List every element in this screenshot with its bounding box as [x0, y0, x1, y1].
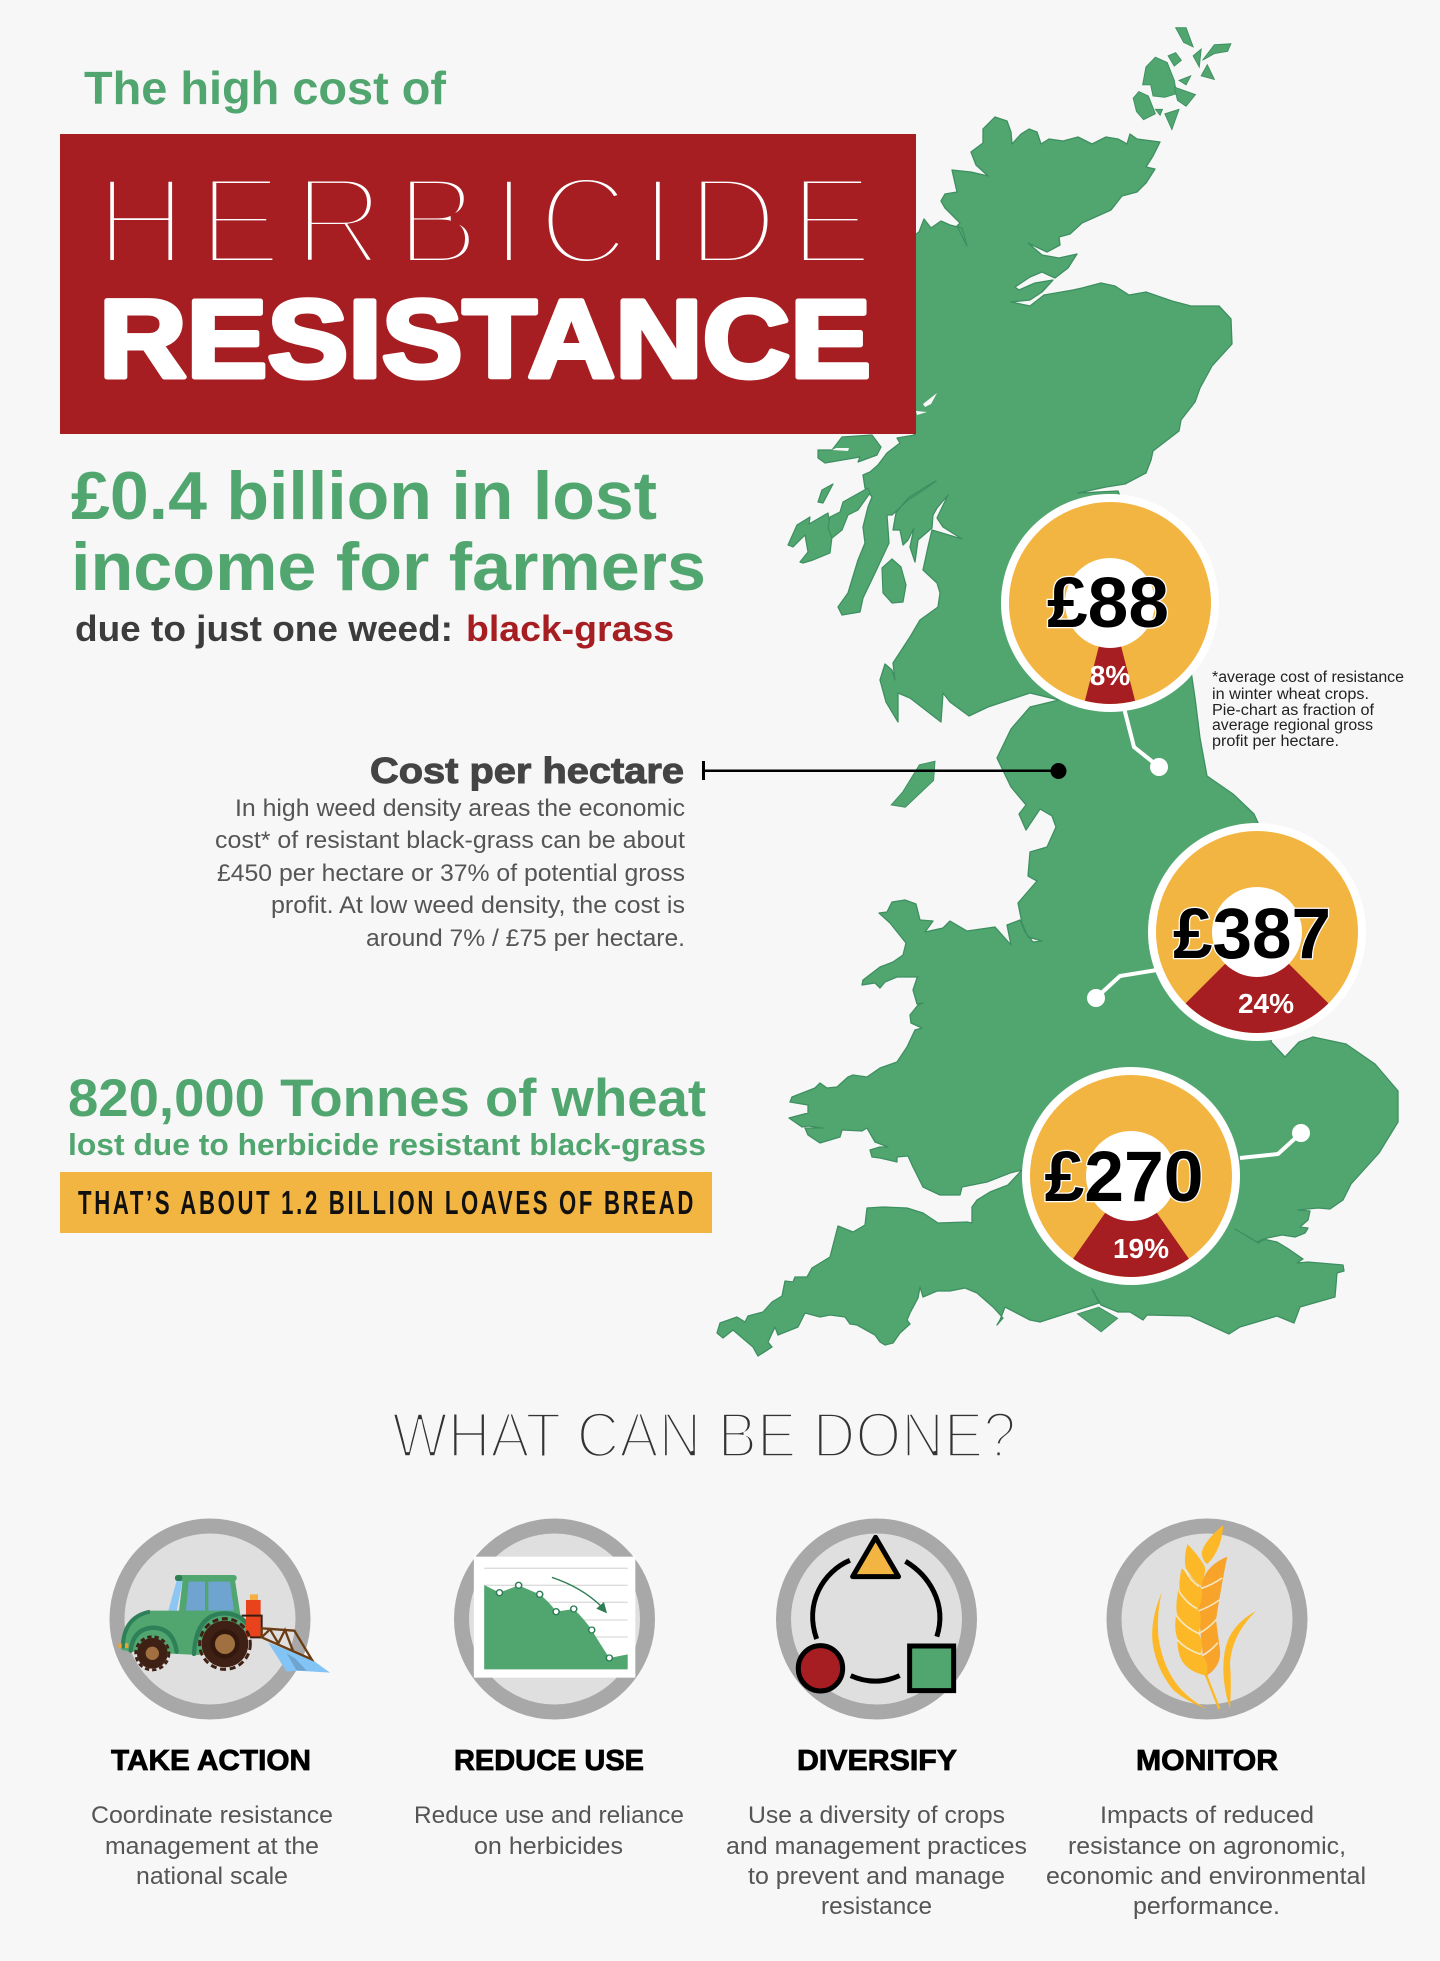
subheading: black-grass: [75, 608, 674, 649]
footnote: *average cost of resistance: [1212, 669, 1404, 686]
action: monitor: economic and environmental: [1046, 1863, 1366, 1890]
action: monitor: [1046, 1745, 1366, 1920]
title banner: RESISTANCE: [99, 278, 871, 401]
Scottish islands: [788, 435, 906, 603]
pie chart: £270: 19%: [1113, 1233, 1169, 1264]
pie chart: £88: [1001, 494, 1219, 712]
footnote: profit per hectare.: [1212, 733, 1339, 750]
pointer: north region: [1124, 708, 1166, 774]
footnote: Pie-chart as fraction of: [1212, 702, 1375, 719]
mainland Great Britain: [717, 117, 1398, 1356]
subheading: black-grass: due to just one weed:: [75, 608, 453, 649]
icon: diversify cycle: [784, 1526, 970, 1712]
bread callout: THAT’S ABOUT 1.2 BILLION LOAVES OF BREAD: [78, 1184, 696, 1221]
title banner: [60, 134, 916, 434]
pointer: south region: [1240, 1126, 1308, 1158]
cost per hectare text: profit. At low weed density, the cost is: [271, 892, 685, 919]
action: take action: [91, 1745, 333, 1890]
pointer: midlands region: [1089, 970, 1157, 1005]
cost per hectare text: [215, 795, 685, 952]
action: take action: national scale: [136, 1863, 288, 1890]
bread callout: [60, 1172, 712, 1233]
pie chart: £88: 8%: [1090, 660, 1130, 691]
wheat stat: lost due to herbicide resistant black-grass: [68, 1127, 706, 1162]
action: diversify: DIVERSIFY: [797, 1745, 957, 1777]
action: take action: Coordinate resistance: [91, 1802, 333, 1829]
action: reduce use: REDUCE USE: [454, 1745, 644, 1777]
action: reduce use: [414, 1745, 684, 1860]
heading: the high cost of: The high cost of: [84, 62, 447, 114]
headline: lost income: income for farmers: [71, 529, 706, 605]
cost per hectare text: cost* of resistant black-grass can be about: [215, 827, 685, 854]
footnote: [1212, 669, 1404, 750]
action: diversify: to prevent and manage: [748, 1863, 1005, 1890]
cost per hectare text: £450 per hectare or 37% of potential gross: [217, 860, 685, 887]
wheat stat: 820,000 Tonnes of wheat: [68, 1069, 706, 1128]
cost per hectare text: In high weed density areas the economic: [235, 795, 685, 822]
action: diversify: Use a diversity of crops: [748, 1802, 1005, 1829]
icon: tractor: [117, 1526, 330, 1712]
pie chart: £387: 24%: [1238, 988, 1294, 1019]
cost per hectare pointer: [702, 761, 1066, 780]
action: monitor: performance.: [1133, 1893, 1280, 1920]
pie chart: £270: [1022, 1067, 1240, 1285]
pie chart: £270: £270: [1044, 1138, 1204, 1217]
action: diversify: resistance: [821, 1893, 932, 1920]
action: take action: TAKE ACTION: [111, 1745, 311, 1777]
headline: lost income: [71, 458, 706, 605]
action: diversify: [726, 1745, 1027, 1920]
action: reduce use: Reduce use and reliance: [414, 1802, 684, 1829]
Isle of Man and Isle of Wight: [891, 761, 1118, 1332]
cost per hectare heading: Cost per hectare: [370, 750, 684, 791]
Orkney islands: [1133, 28, 1231, 129]
action: diversify: and management practices: [726, 1833, 1027, 1860]
pie chart: £387: £387: [1173, 895, 1331, 974]
headline: lost income: £0.4 billion in lost: [71, 458, 657, 534]
footnote: in winter wheat crops.: [1212, 686, 1369, 703]
section heading: WHAT CAN BE DONE?: [392, 1399, 1016, 1471]
pie chart: £387: [1148, 823, 1366, 1041]
icon: falling chart: [462, 1526, 648, 1712]
wheat stat: [68, 1069, 706, 1162]
map of the UK: [717, 28, 1398, 1356]
action: take action: management at the: [105, 1833, 319, 1860]
action: monitor: Impacts of reduced: [1100, 1802, 1314, 1829]
icon: wheat: [1114, 1525, 1300, 1712]
subheading: black-grass: black-grass: [466, 608, 674, 649]
action: monitor: resistance on agronomic,: [1068, 1833, 1346, 1860]
title banner: HERBICIDE: [96, 152, 873, 291]
footnote: average regional gross: [1212, 717, 1373, 734]
pie chart: £88: £88: [1047, 564, 1169, 643]
cost per hectare text: around 7% / £75 per hectare.: [366, 925, 685, 952]
action: reduce use: on herbicides: [474, 1833, 623, 1860]
action: monitor: MONITOR: [1136, 1745, 1278, 1777]
